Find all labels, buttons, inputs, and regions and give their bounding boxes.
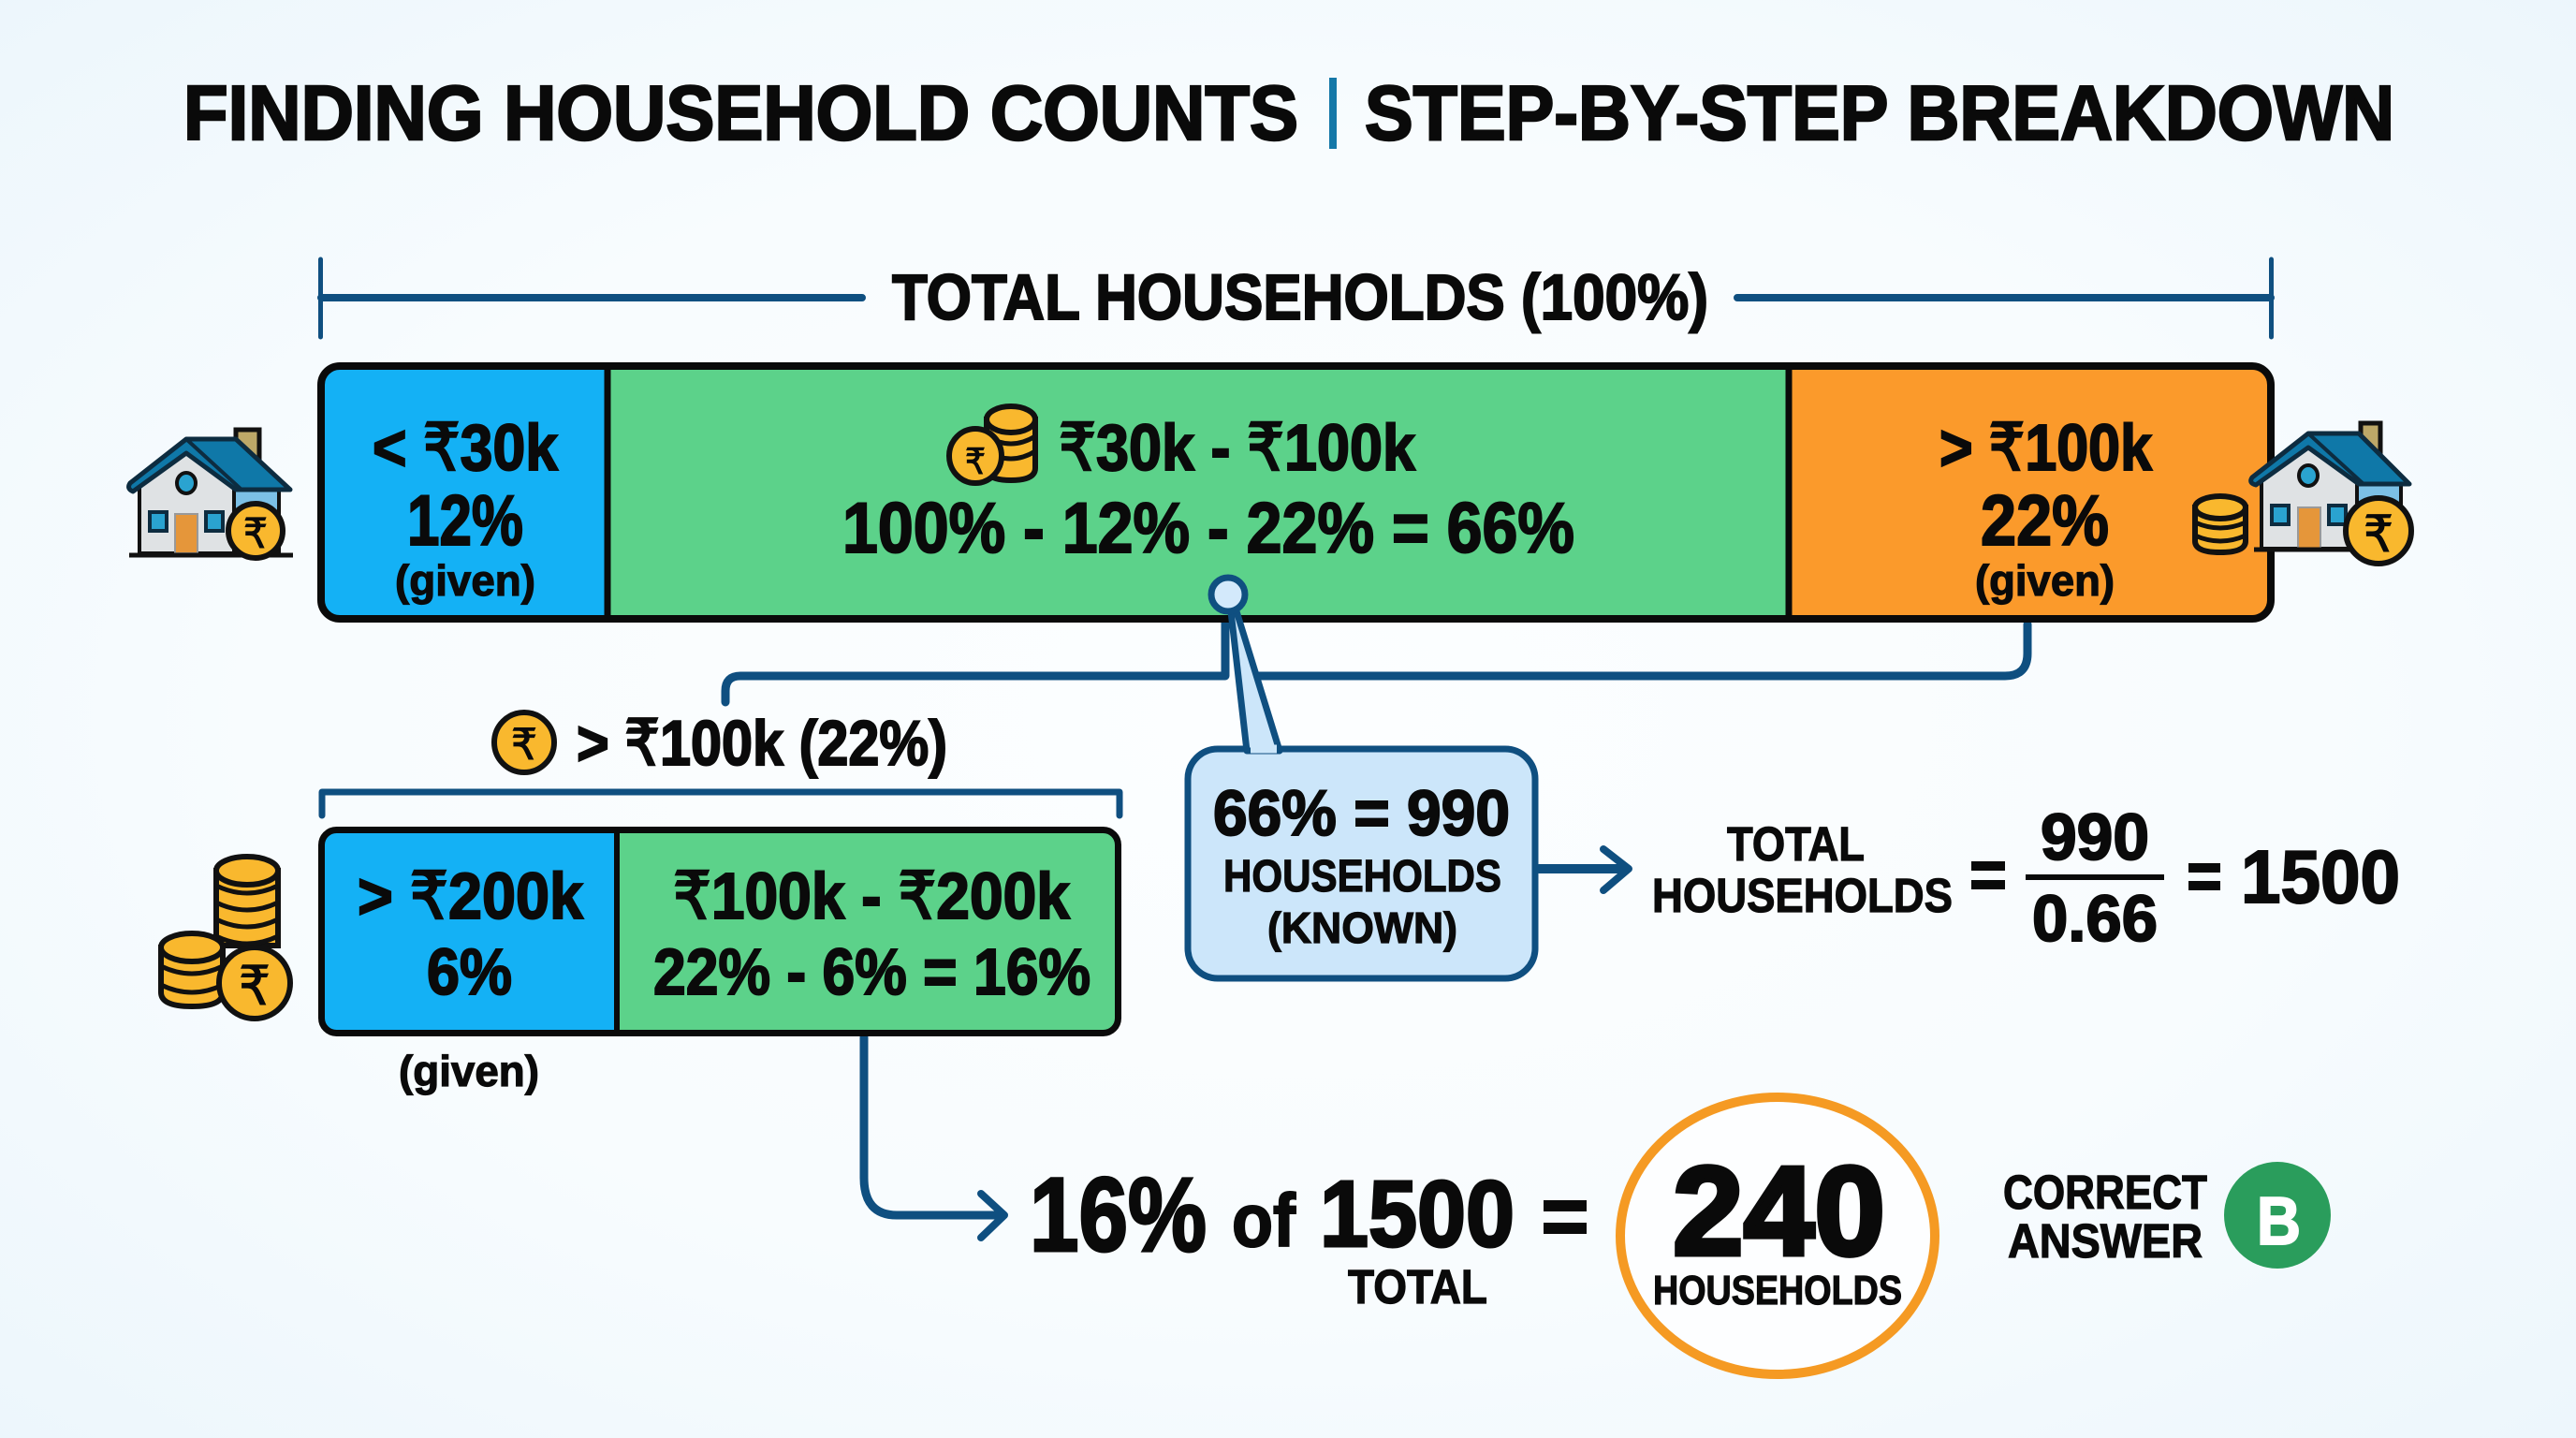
pointer dot xyxy=(1211,578,1245,611)
segment: under 30k: < ₹30k xyxy=(373,411,558,484)
callout: 66% equals 990: 66% = 990 xyxy=(1213,777,1510,849)
heading: over 100k 22 percent: > ₹100k (22%) xyxy=(577,708,947,779)
segment: 30k to 100k xyxy=(607,366,1789,619)
bracket: total households: TOTAL HOUSEHOLDS (100%) xyxy=(892,261,1708,333)
bracket: over 100k split xyxy=(322,792,1120,815)
segment: 30k to 100k: 100% - 12% - 22% = 66% xyxy=(842,489,1574,568)
segment: under 30k xyxy=(321,366,607,619)
title xyxy=(183,69,2394,156)
formula: total households xyxy=(1652,800,2400,955)
icon: house left xyxy=(129,430,293,558)
segment: over 100k: > ₹100k xyxy=(1939,411,2152,484)
correct answer badge: CORRECT xyxy=(2003,1166,2207,1219)
segment: over 200k xyxy=(322,830,617,1033)
icon: house left: ₹ xyxy=(243,511,268,557)
note: given: (given) xyxy=(399,1047,539,1095)
result: 240 households: HOUSEHOLDS xyxy=(1653,1268,1902,1313)
segment: 100k to 200k: 22% - 6% = 16% xyxy=(653,935,1090,1008)
final calculation: 16 percent of 1500: of xyxy=(1232,1179,1295,1262)
segment: 100k to 200k xyxy=(617,830,1119,1033)
bracket: total households xyxy=(320,259,2271,337)
segment: under 30k: 12% xyxy=(407,481,523,561)
segment: over 200k: > ₹200k xyxy=(358,859,583,932)
correct answer badge xyxy=(2003,1162,2331,1269)
result: 240 households: 240 xyxy=(1673,1140,1885,1282)
final calculation: 16 percent of 1500: 1500 xyxy=(1320,1162,1515,1267)
correct answer badge: B xyxy=(2257,1184,2301,1259)
icon: coins in green segment xyxy=(949,406,1035,483)
icon: coins and house right xyxy=(2195,423,2411,564)
income bar: total households xyxy=(321,366,2271,619)
formula: total households: HOUSEHOLDS xyxy=(1652,869,1953,922)
formula: total households: 0.66 xyxy=(2032,882,2158,955)
segment: over 100k: (given) xyxy=(1975,556,2115,605)
final calculation: 16 percent of 1500 xyxy=(1030,1156,1587,1313)
final calculation: 16 percent of 1500: 16% xyxy=(1030,1156,1207,1273)
callout: 66% equals 990 xyxy=(1188,578,1535,978)
title: STEP-BY-STEP BREAKDOWN xyxy=(1365,69,2394,156)
segment: over 100k xyxy=(1789,366,2271,619)
callout: 66% equals 990: (KNOWN) xyxy=(1267,903,1457,952)
segment: over 100k: 22% xyxy=(1981,481,2109,561)
formula: total households: TOTAL xyxy=(1727,817,1865,871)
pointer xyxy=(1231,611,1280,751)
icon: coin stacks xyxy=(161,857,290,1019)
formula: total households: 1500 xyxy=(2241,835,2400,918)
final calculation: 16 percent of 1500: TOTAL xyxy=(1348,1260,1487,1313)
segment: 100k to 200k: ₹100k - ₹200k xyxy=(673,859,1070,932)
connector: down to final calculation xyxy=(864,1037,1004,1238)
icon: coins in green segment: ₹ xyxy=(965,443,986,482)
result: 240 households xyxy=(1620,1097,1935,1374)
correct answer badge: ANSWER xyxy=(2008,1214,2203,1268)
formula: total households: 990 xyxy=(2041,800,2149,873)
segment: over 200k: 6% xyxy=(427,935,512,1008)
title: FINDING HOUSEHOLD COUNTS xyxy=(183,69,1298,156)
callout: 66% equals 990: HOUSEHOLDS xyxy=(1223,852,1501,902)
arrow: callout to formula xyxy=(1539,849,1629,890)
heading: over 100k 22 percent: ₹ xyxy=(511,720,537,769)
segment: 30k to 100k: ₹30k - ₹100k xyxy=(1059,411,1415,484)
connectors from bar to callout xyxy=(725,614,2027,702)
segment: under 30k: (given) xyxy=(395,556,535,605)
icon: coin stacks: ₹ xyxy=(239,956,271,1017)
income bar: over 100k split xyxy=(322,829,1119,1034)
icon: coins and house right: ₹ xyxy=(2364,506,2393,563)
